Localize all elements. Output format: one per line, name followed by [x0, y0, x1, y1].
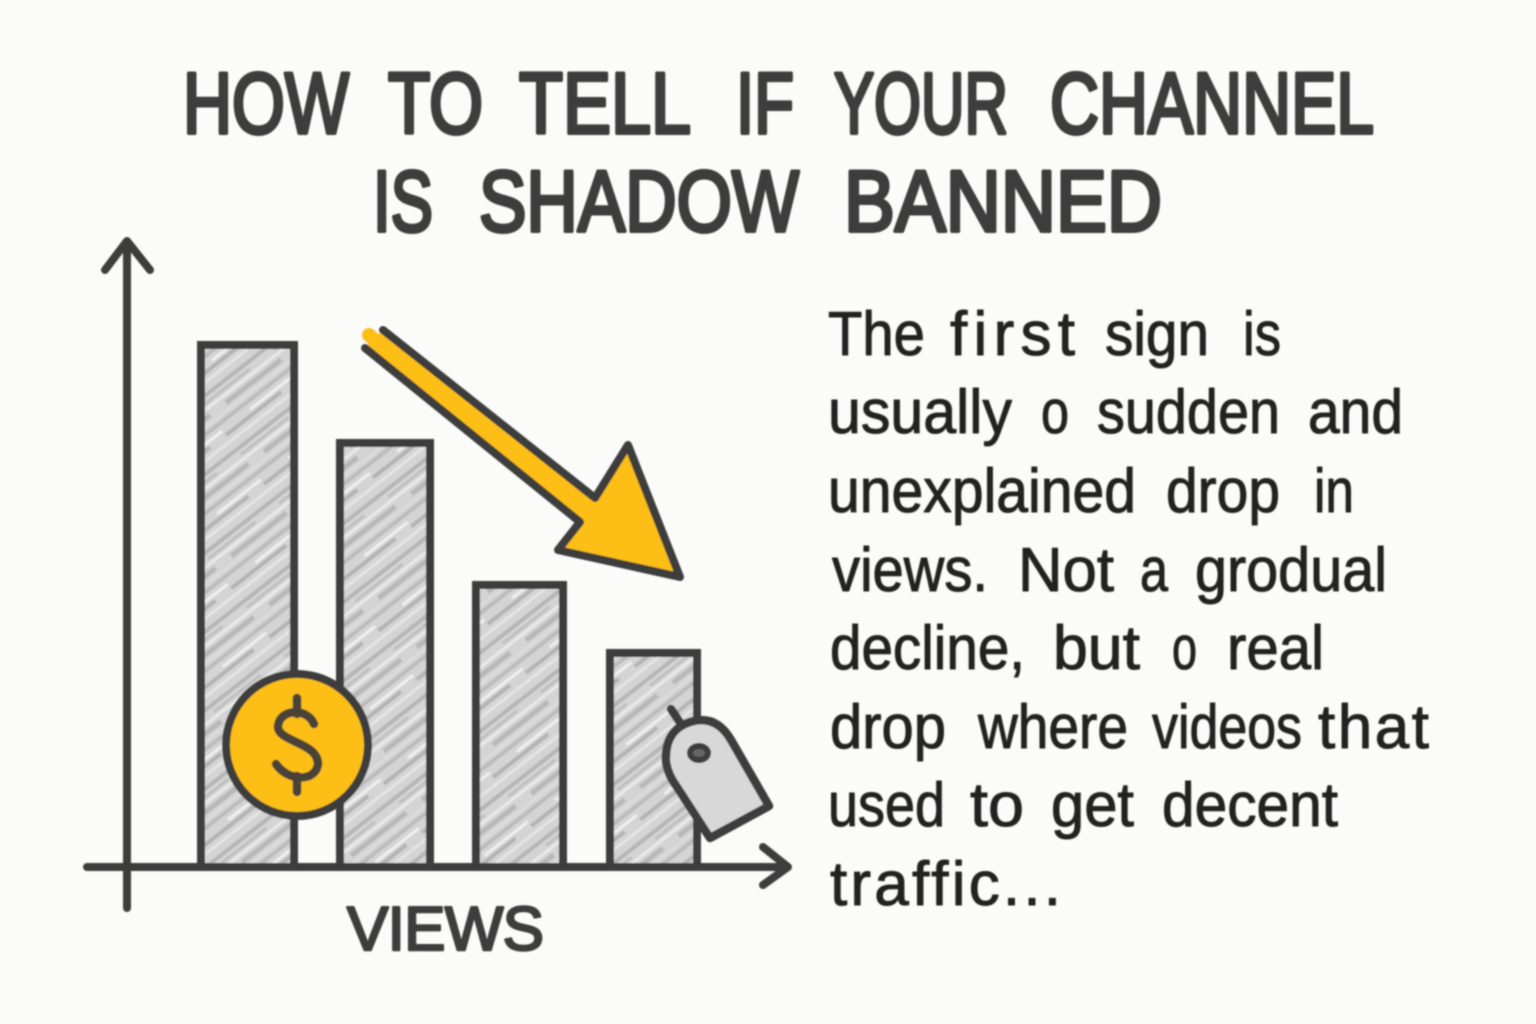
- body text: get: [1051, 771, 1134, 840]
- bar 2: [340, 443, 430, 867]
- bar chart: views: [87, 241, 788, 964]
- body text: but: [1053, 614, 1140, 683]
- body text: and: [1308, 378, 1403, 447]
- body text: [828, 300, 1429, 919]
- bar 1: [201, 345, 294, 867]
- title: IF: [736, 56, 794, 152]
- title: TELL: [519, 56, 691, 152]
- title: HOW: [183, 56, 349, 152]
- body text: videos: [1152, 693, 1302, 762]
- title: IS: [373, 154, 433, 250]
- body text: sign: [1105, 300, 1209, 369]
- title: CHANNEL: [1050, 56, 1374, 152]
- title: TO: [388, 56, 483, 152]
- bar 4: [610, 653, 697, 867]
- title: SHADOW: [479, 154, 799, 250]
- icon: price tag: [666, 709, 769, 838]
- body text: real: [1227, 614, 1324, 683]
- body text: in: [1314, 457, 1354, 526]
- body text: drop: [830, 693, 946, 762]
- icon: dollar coin: [226, 674, 368, 816]
- arrow: downward trend: [365, 330, 680, 577]
- body text: o: [1172, 614, 1197, 683]
- body text: o: [1041, 378, 1069, 447]
- body text: grodual: [1195, 536, 1387, 605]
- body text: decline,: [830, 614, 1025, 683]
- axis label: VIEWS: [347, 895, 544, 964]
- title: YOUR: [834, 56, 1008, 152]
- body text: is: [1243, 300, 1281, 369]
- body text: a: [1140, 536, 1168, 605]
- body text: to: [970, 771, 1024, 840]
- body text: traffic...: [830, 850, 1061, 919]
- title: BANNED: [844, 154, 1162, 250]
- y axis arrow: [105, 241, 150, 908]
- body text: views.: [832, 536, 988, 605]
- body text: The: [828, 300, 925, 369]
- body text: where: [977, 693, 1128, 762]
- body text: used: [828, 771, 945, 840]
- bar 3: [476, 585, 563, 867]
- title: [183, 56, 1374, 250]
- body text: usually: [828, 378, 1012, 447]
- body text: unexplained: [828, 457, 1136, 526]
- body text: decent: [1162, 771, 1338, 840]
- body text: Not: [1018, 536, 1114, 605]
- body text: drop: [1166, 457, 1280, 526]
- body text: first: [950, 300, 1075, 369]
- x axis arrow: [87, 847, 788, 885]
- body text: that: [1318, 693, 1429, 762]
- body text: sudden: [1097, 378, 1280, 447]
